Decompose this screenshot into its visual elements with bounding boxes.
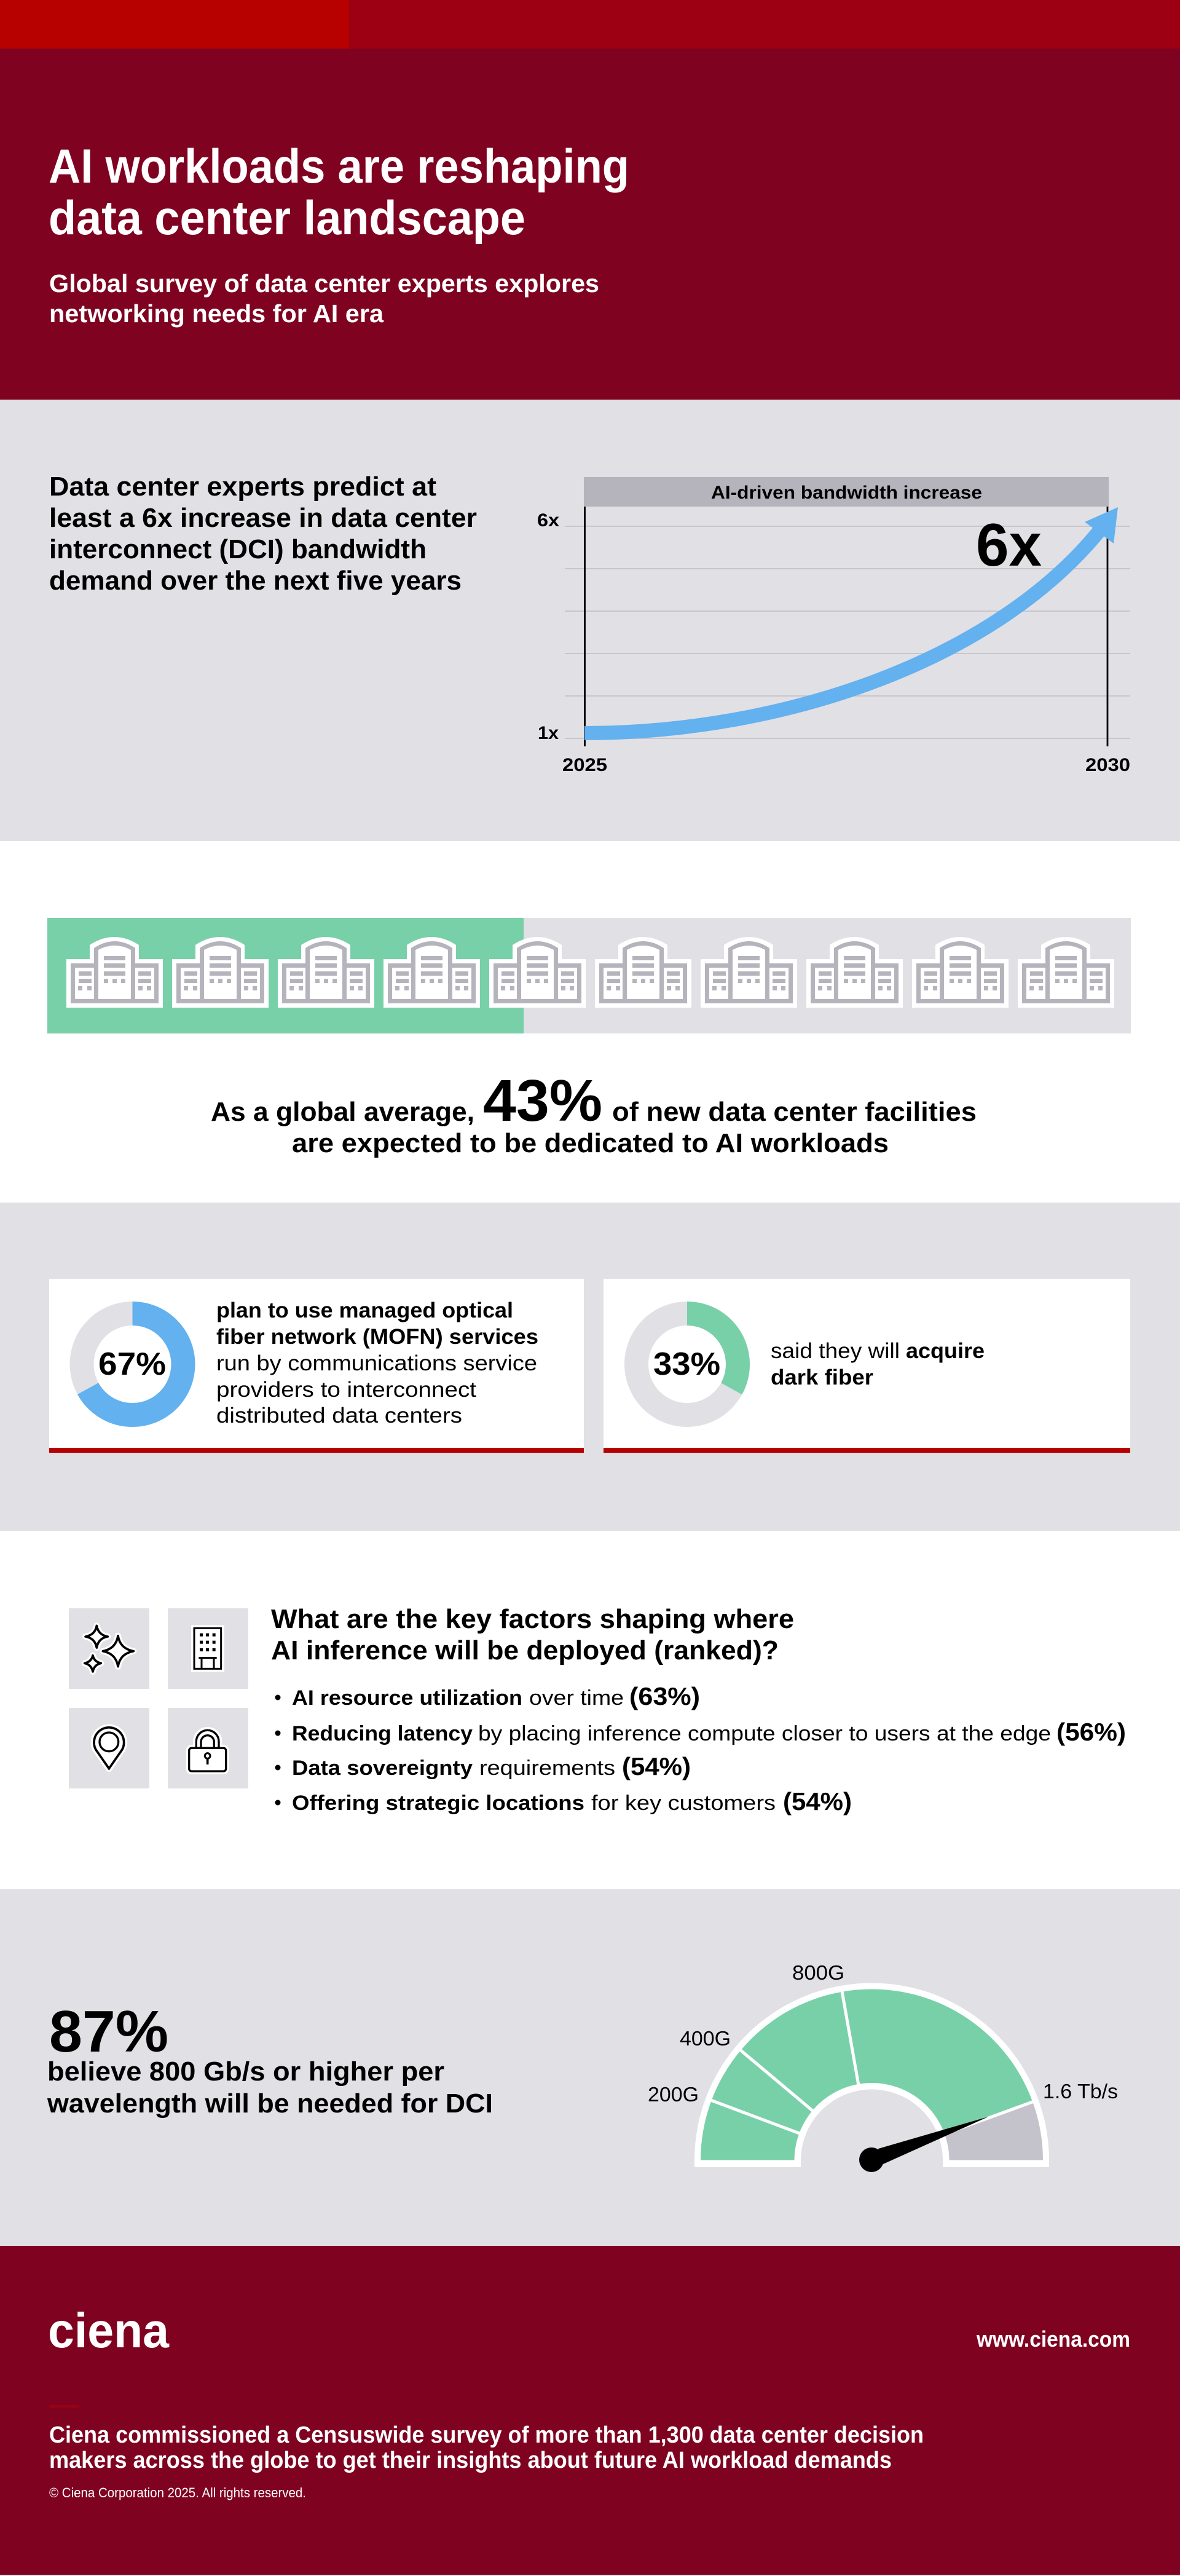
panel: new data center facilities [0,841,1180,1203]
card text: acquire [906,1339,985,1363]
chart header bar: AI-driven bandwidth increase [711,483,982,503]
card text: dark fiber [771,1365,873,1389]
donut chart: 67 percent [82,1313,183,1415]
axis labels [537,510,1130,775]
card: 67 percent MOFN [49,1279,584,1453]
heading: key factors [271,1604,794,1665]
factor: reducing latency: Reducing latency [292,1722,473,1745]
card text: run by communications service [216,1351,537,1375]
chart header bar [584,477,1109,507]
arrow: growth curve [584,507,1118,733]
gauge needle [859,2117,988,2172]
statement: 43 percent: 43% [483,1068,602,1134]
gauge labels: 800G [792,1961,844,1984]
website link: www.ciena.com [976,2326,1130,2352]
donut chart: 33 percent [637,1313,738,1415]
icon: location pin [94,1728,124,1769]
survey note: makers across the globe to get their insights about future AI workload demands [49,2448,892,2473]
card text [771,1339,985,1389]
bandwidth statement text [49,472,477,596]
gauge chart [648,1961,1118,2172]
gauge labels: 200G [648,2083,699,2106]
factor: data sovereignty: (54%) [622,1752,691,1780]
panel: header [0,0,1180,400]
panel: bandwidth forecast [0,400,1180,841]
progress bar: 43 percent [47,918,1131,1033]
axis labels: 2030 [1085,755,1130,775]
gauge segment: up to 1.6 Tb/s reached [701,1989,1032,2160]
subtitle [49,269,599,328]
panel: AI inference factors [0,1531,1180,1889]
bandwidth statement text: least a 6x increase in data center [49,503,477,533]
factor: AI resource utilization [275,1682,700,1710]
big stat: 87 percent: 87% [49,1999,168,2064]
accent dash [49,2405,79,2408]
card text [216,1298,538,1428]
survey note [49,2422,924,2473]
icon: sparkles [85,1626,133,1672]
gauge labels: 1.6 Tb/s [1043,2080,1118,2103]
line chart: AI-driven bandwidth increase [537,477,1130,775]
stat description: believe 800 Gb/s or higher per [47,2056,444,2087]
copyright: © Ciena Corporation 2025. All rights reserved. [49,2485,306,2500]
icon grid [69,1608,248,1788]
subtitle: networking needs for AI era [49,299,384,328]
factor: AI resource utilization: (63%) [629,1682,700,1710]
card text: fiber network (MOFN) services [216,1325,538,1349]
heading: key factors: AI inference will be deployed (ranked)? [271,1635,779,1665]
factor: reducing latency: (56%) [1056,1718,1126,1746]
panel: footer [0,2246,1180,2576]
statement: 43 percent: are expected to be dedicated to AI workloads [292,1128,889,1158]
icon: office building [191,1625,224,1672]
donut chart: 33 percent: 33% [653,1346,720,1382]
survey note: Ciena commissioned a Censuswide survey of more than 1,300 data center decision [49,2422,924,2448]
factor: strategic locations: (54%) [783,1787,852,1815]
callout: 6x: 6x [976,511,1042,579]
factor: AI resource utilization: over time [529,1686,624,1710]
factor: data sovereignty: requirements [479,1756,615,1780]
ranked factor list [275,1682,1126,1815]
subtitle: Global survey of data center experts explores [49,269,599,298]
factor: AI resource utilization: AI resource utilization [292,1686,522,1710]
factor: data sovereignty [275,1752,691,1780]
factor: data sovereignty: Data sovereignty [292,1756,473,1780]
factor: reducing latency: by placing inference compute closer to users at the edge [478,1722,1051,1745]
icon: padlock [189,1730,226,1771]
factor: strategic locations: Offering strategic locations [292,1792,584,1815]
stat description: wavelength will be needed for DCI [47,2088,493,2119]
axis labels: 1x [538,723,559,743]
bandwidth statement text: demand over the next five years [49,566,462,596]
axis labels: 2025 [562,755,607,775]
panel: wavelength speed [0,1889,1180,2246]
title: data center landscape [49,191,525,245]
gauge labels: 400G [680,2027,731,2050]
bandwidth statement text: interconnect (DCI) bandwidth [49,534,427,564]
data center icon row [66,937,1114,1008]
statement: 43 percent: of new data center facilities [612,1097,977,1127]
card text: providers to interconnect [216,1378,476,1402]
title [49,139,629,245]
axis labels: 6x [537,510,559,531]
statement: 43 percent [211,1068,977,1158]
factor: strategic locations: for key customers [591,1792,776,1815]
heading: key factors: What are the key factors shaping where [271,1604,794,1634]
logo: ciena: ciena [48,2303,169,2358]
factor: reducing latency [275,1718,1126,1746]
card: 33 percent dark fiber [604,1279,1130,1453]
gauge segment: remaining [945,2102,1043,2160]
gauge labels [648,1961,1118,2106]
stat description [47,2056,493,2119]
card text: said they will [771,1339,900,1363]
statement: 43 percent: As a global average, [211,1097,474,1127]
factor: strategic locations [275,1787,852,1815]
card text: distributed data centers [216,1404,462,1428]
panel: interconnect plans [0,1203,1180,1531]
title: AI workloads are reshaping [49,139,629,193]
bandwidth statement text: Data center experts predict at [49,472,436,502]
card text: plan to use managed optical [216,1298,513,1322]
donut chart: 67 percent: 67% [98,1346,166,1382]
